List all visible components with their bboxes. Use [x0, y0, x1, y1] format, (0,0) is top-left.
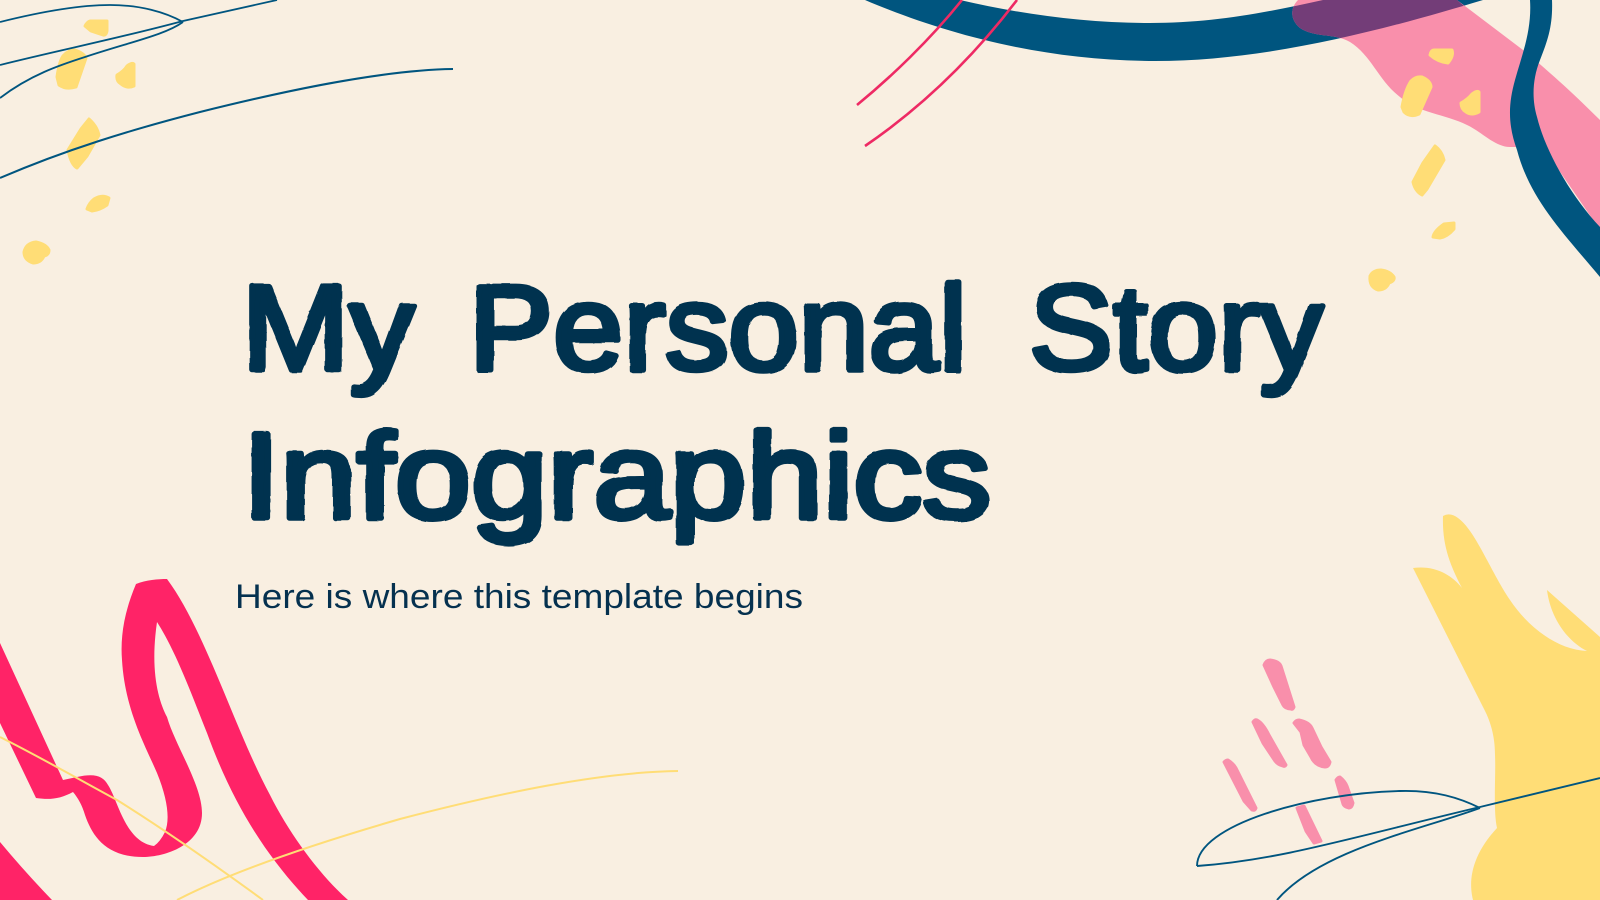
- bottom right pink dashes: [1224, 660, 1353, 843]
- subtitle: Here is where this template begins: [235, 578, 803, 616]
- top left blue line sketch: [0, 0, 453, 178]
- top left yellow dots: [24, 21, 134, 263]
- top centre pink strokes: [857, 0, 1017, 146]
- bottom left yellow lines: [0, 737, 678, 900]
- title: Story: [1029, 260, 1323, 396]
- top centre blue arc: [865, 0, 1483, 61]
- title: Infographics: [242, 408, 991, 544]
- bottom right blue line sketch: [1197, 778, 1600, 900]
- bottom left pink ribbon: [0, 579, 348, 900]
- top right blue ribbon: [1510, 0, 1600, 277]
- top right yellow dots: [1370, 50, 1479, 290]
- title: My: [242, 260, 414, 396]
- top right pink blob: [1292, 0, 1600, 230]
- title: [242, 260, 1323, 544]
- bottom right yellow shape: [1413, 514, 1600, 900]
- title: Personal: [469, 260, 967, 396]
